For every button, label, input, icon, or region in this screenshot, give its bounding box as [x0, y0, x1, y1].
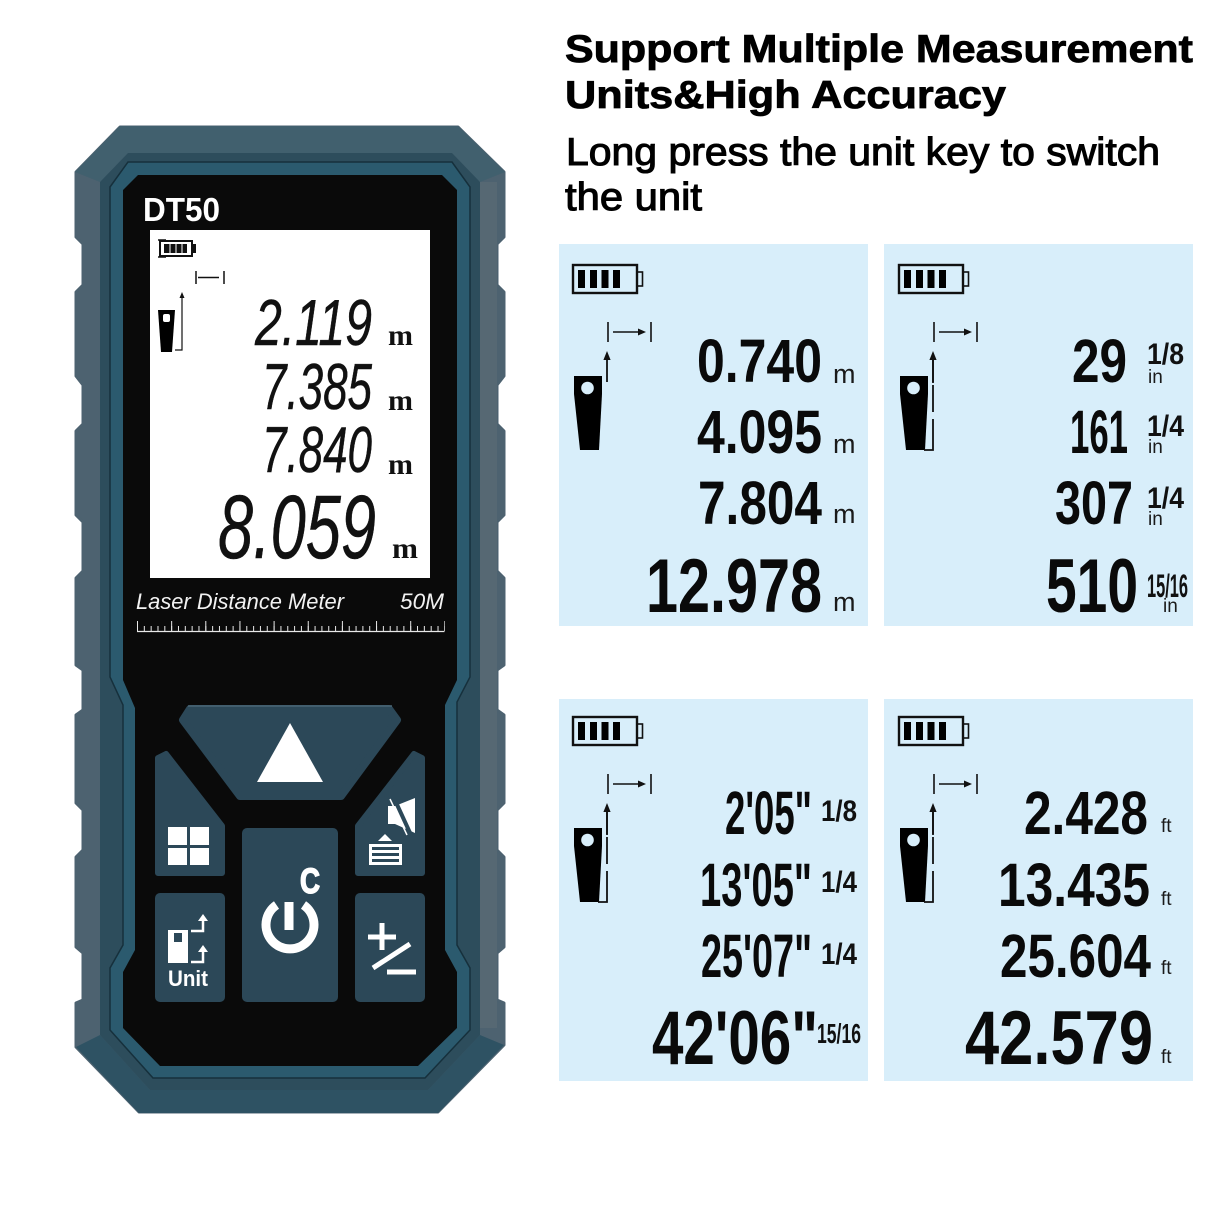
button: mute and history — [358, 754, 422, 873]
icon: battery — [158, 240, 196, 257]
reading: 2.428 ft: ft — [1161, 816, 1172, 837]
reading: 7.804 m: m — [833, 499, 856, 529]
device body silhouette with ribbed sides — [76, 127, 504, 1112]
panel: feet and inches — [559, 699, 868, 1081]
reading: 25.604 ft: 25.604 — [1000, 922, 1151, 990]
label: C: C — [300, 862, 320, 901]
icon: range arrow — [196, 271, 224, 284]
reading: 13.435 ft: 13.435 — [998, 851, 1150, 919]
reading: 29 1/8 in: 29 — [1072, 327, 1127, 395]
reading: 29 1/8 in: in — [1148, 367, 1163, 388]
button: measure up — [183, 706, 397, 796]
reading: 42.579 ft: ft — [1161, 1047, 1172, 1068]
panel: decimal feet — [884, 699, 1193, 1081]
icon: triangle — [257, 723, 323, 782]
reading: 161 1/4 in: 161 — [1070, 398, 1128, 466]
button: plus minus — [355, 893, 425, 1002]
reading: 4.095 m: m — [833, 429, 856, 459]
heading: Support Multiple Measurement Units&High Accuracy — [565, 28, 1193, 117]
heading: Support Multiple Measurement Units&High Accuracy: Support Multiple Measurement — [565, 28, 1193, 71]
icon: power — [266, 902, 314, 949]
reading: 42'06" 15/16: 42'06" — [652, 996, 818, 1081]
reading: 2.119 m: 2.119 — [254, 286, 372, 359]
reading: 161 1/4 in: in — [1148, 437, 1163, 458]
icon: grid — [168, 827, 209, 865]
bottom bevel — [76, 1035, 504, 1113]
subheading: Long press the unit key to switch the unit: Long press the unit key to switch — [566, 131, 1160, 174]
reading: 13'05" 1/4: 13'05" — [700, 851, 812, 919]
reading: 7.804 m: 7.804 — [698, 469, 822, 537]
LCD screen — [150, 230, 430, 578]
reading: 25.604 ft: ft — [1161, 958, 1172, 979]
icon: device with reference arrows — [168, 914, 208, 963]
top bevel — [75, 126, 505, 182]
icon: plus slash minus — [368, 923, 416, 972]
reading: 12.978 m: m — [833, 587, 856, 617]
right side lighter strip — [480, 182, 497, 1028]
reading: 2'05" 1/8: 2'05" — [725, 779, 812, 847]
panel: inches — [884, 244, 1193, 629]
heading: Support Multiple Measurement Units&High Accuracy: Units&High Accuracy — [565, 74, 1006, 117]
teal ring — [110, 162, 470, 1078]
reading: 7.840 m: 7.840 — [262, 413, 372, 486]
icon: mute speaker — [388, 798, 415, 835]
reading: 7.840 m: m — [388, 448, 413, 481]
reading: 4.095 m: 4.095 — [697, 398, 822, 466]
panel: metres — [559, 244, 868, 629]
reading: 0.740 m: 0.740 — [697, 327, 822, 395]
device: DT50 laser distance meter — [75, 126, 505, 1113]
reading: 25'07" 1/4: 25'07" — [701, 922, 812, 990]
LCD icons — [573, 265, 651, 450]
reading: 2.119 m: m — [388, 319, 413, 352]
reading: 161 1/4 in: 1/4 — [1147, 410, 1184, 443]
reading: 42.579 ft: 42.579 — [965, 996, 1153, 1081]
label: Laser Distance Meter: Laser Distance Meter — [136, 589, 346, 614]
reading: 29 1/8 in: 1/8 — [1147, 338, 1184, 371]
reading: 2.428 ft: 2.428 — [1024, 779, 1148, 847]
reading: 8.059 m: 8.059 — [218, 478, 376, 578]
reading: 510 15/16 in: 510 — [1046, 544, 1138, 629]
reading: 510 15/16 in: in — [1163, 596, 1178, 617]
subheading: Long press the unit key to switch the unit: the unit — [565, 176, 702, 219]
reading: 8.059 m: m — [392, 532, 418, 565]
LCD icons — [573, 717, 651, 902]
reading: 25'07" 1/4: 1/4 — [821, 938, 857, 971]
icon: device reference — [158, 292, 184, 352]
reading: 7.385 m: m — [388, 384, 413, 417]
ruler scale — [137, 626, 445, 632]
reading: 2'05" 1/8: 1/8 — [821, 795, 857, 828]
LCD icons — [899, 265, 977, 450]
button: unit — [155, 893, 225, 1002]
reading: 13'05" 1/4: 1/4 — [821, 866, 857, 899]
button: power and clear — [242, 828, 338, 1002]
icon: history list — [369, 834, 402, 865]
reading: 29 1/8 in — [1072, 327, 1184, 395]
reading: 7.385 m: 7.385 — [262, 350, 373, 423]
LCD icons — [899, 717, 977, 902]
label: 50M: 50M — [400, 589, 445, 614]
reading: 307 1/4 in: 1/4 — [1147, 482, 1184, 515]
inner side band — [100, 153, 480, 1090]
button: area functions — [158, 754, 222, 873]
reading: 42'06" 15/16: 15/16 — [817, 1018, 861, 1049]
reading: 307 1/4 in: in — [1148, 509, 1163, 530]
reading: 0.740 m: m — [833, 359, 856, 389]
reading: 307 1/4 in: 307 — [1055, 469, 1133, 537]
reading: 13.435 ft: ft — [1161, 889, 1172, 910]
black front panel — [123, 175, 457, 1066]
reading: 12.978 m: 12.978 — [646, 544, 822, 629]
label: Unit: Unit — [168, 966, 209, 991]
model name: DT50 — [143, 191, 220, 228]
subheading: Long press the unit key to switch the unit — [565, 131, 1160, 219]
